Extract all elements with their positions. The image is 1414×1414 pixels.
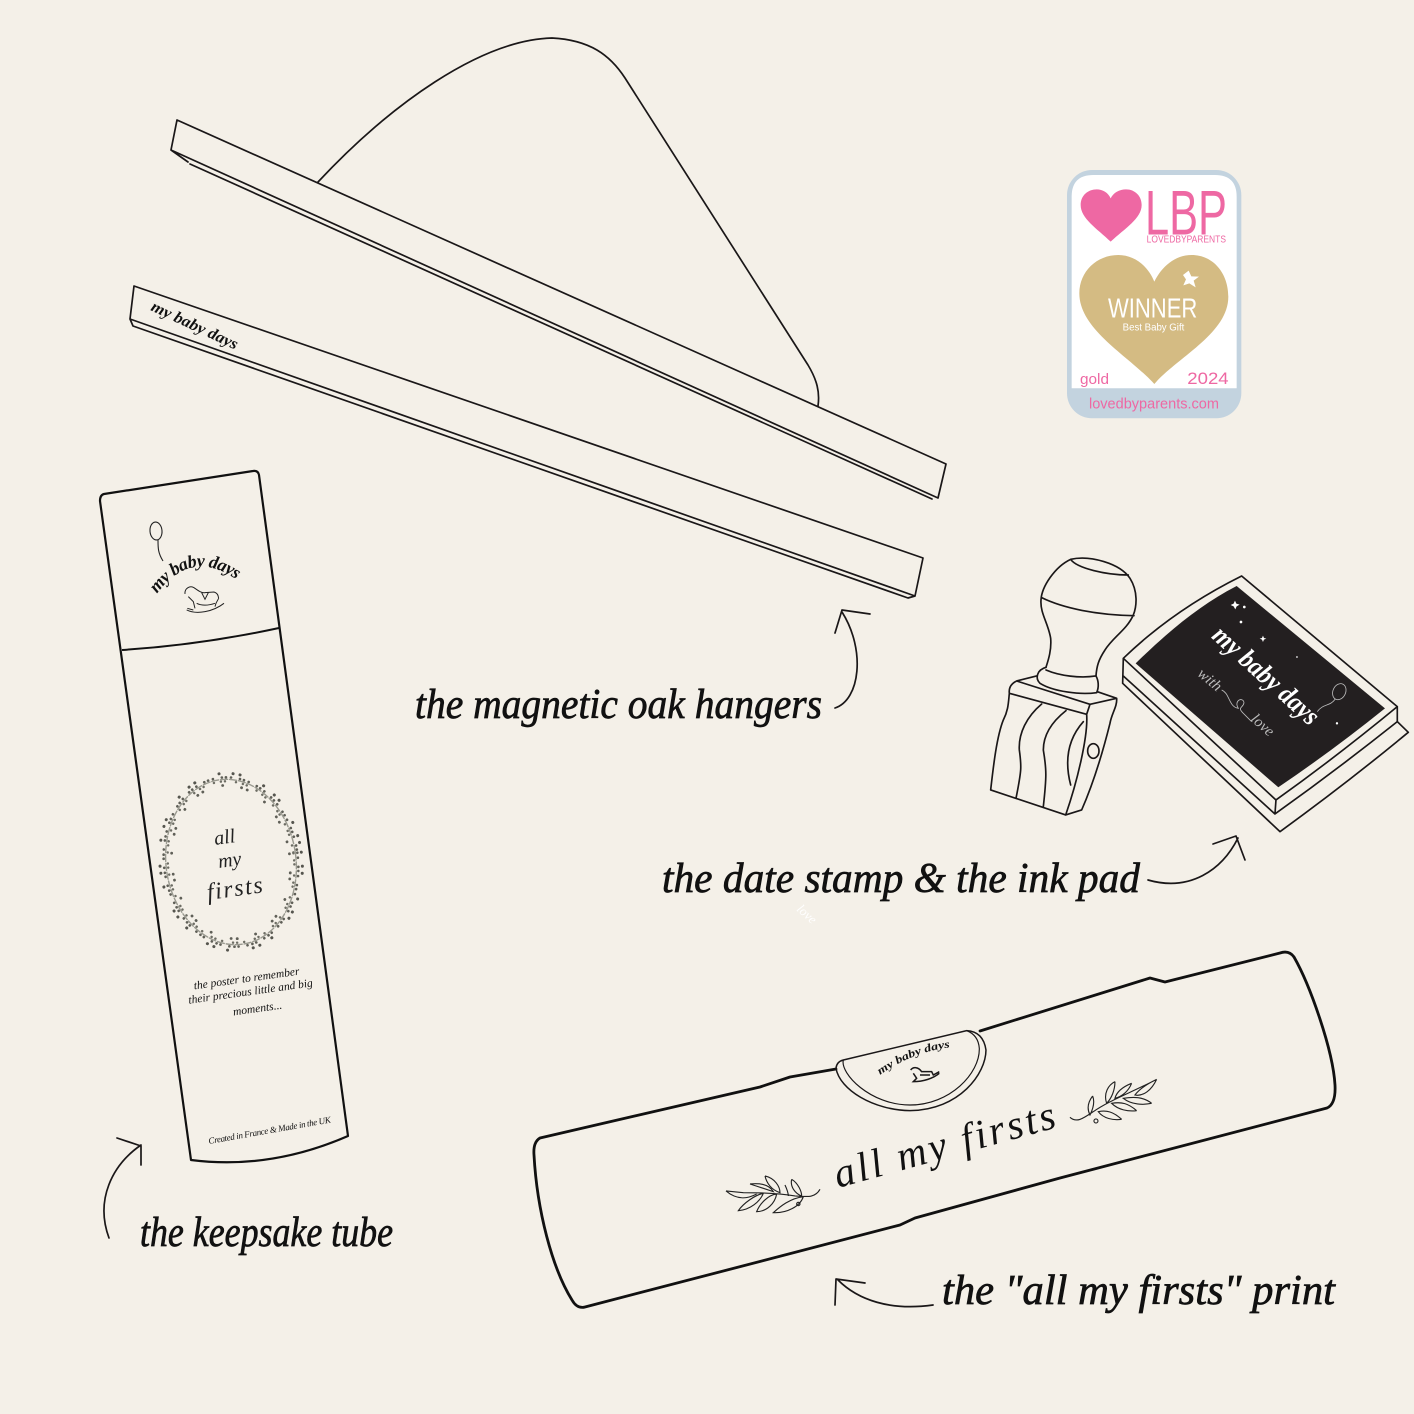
roll outline xyxy=(534,952,1335,1307)
tube footer: Created in France & Made in the UK xyxy=(208,1114,332,1146)
icon: pink heart xyxy=(1081,189,1142,242)
stars xyxy=(1231,601,1338,724)
tube tagline: moments... xyxy=(232,1000,283,1018)
heading: the all my firsts print: the "all my firsts" print xyxy=(942,1268,1336,1314)
tube outline xyxy=(100,471,348,1162)
WINNER: WINNER xyxy=(1108,292,1197,323)
LOVEDBYPARENTS: LOVEDBYPARENTS xyxy=(1147,234,1226,245)
heading: the keepsake tube: the keepsake tube xyxy=(140,1210,393,1256)
pad brand text: my baby days xyxy=(1207,619,1326,731)
icon: rocking horse xyxy=(185,587,224,612)
tube tagline xyxy=(188,966,314,1018)
panel: ink pad xyxy=(1123,576,1408,832)
print title text: all my firsts xyxy=(828,1091,1060,1197)
icon: star xyxy=(1183,271,1199,287)
balloon xyxy=(149,522,163,561)
arrow: to print xyxy=(835,1279,933,1307)
icon: right branch xyxy=(1070,1079,1157,1123)
gold: gold xyxy=(1080,371,1109,388)
poster corner held by the hanger xyxy=(318,38,819,406)
tube tagline: their precious little and big xyxy=(188,977,314,1007)
icon: gold heart xyxy=(1079,255,1228,384)
with love text xyxy=(1194,665,1278,740)
panel: all my firsts rolled print xyxy=(532,950,1336,1309)
wreath text xyxy=(205,825,264,906)
with love text: love xyxy=(1247,710,1278,740)
badge frame xyxy=(1067,170,1241,418)
2024: 2024 xyxy=(1187,369,1229,388)
panel: magnetic oak hangers illustration xyxy=(130,38,946,598)
Best Baby Gift: Best Baby Gift xyxy=(1123,323,1184,334)
icon: seal rocking horse xyxy=(911,1068,939,1082)
arrow: to tube xyxy=(104,1138,141,1238)
lower hanger xyxy=(130,286,923,598)
panel: date stamp xyxy=(991,558,1136,815)
with love text: with xyxy=(1194,665,1225,695)
panel: keepsake tube xyxy=(98,470,350,1164)
tube brand text: my baby days xyxy=(151,555,240,594)
wreath text: firsts xyxy=(205,872,264,906)
pad casing xyxy=(1123,576,1408,832)
wreath text: all xyxy=(213,825,237,850)
heading: the magnetic oak hangers: the magnetic oak hangers xyxy=(415,682,822,728)
seal brand text: my baby days xyxy=(878,1042,950,1075)
paper seal xyxy=(836,1031,986,1111)
LBP logo text: LBP xyxy=(1145,178,1227,248)
wreath text: my xyxy=(217,848,243,873)
stamp handle xyxy=(1041,558,1136,676)
wreath xyxy=(148,764,314,960)
upper hanger xyxy=(171,120,946,499)
lid divider xyxy=(122,628,279,650)
panel: LBP award badge xyxy=(1067,170,1241,418)
icon: left branch xyxy=(726,1176,820,1213)
arrow: to hangers xyxy=(835,610,870,708)
faint love mark: love xyxy=(794,901,820,927)
thread and heart xyxy=(1222,690,1252,722)
black ink surface xyxy=(1136,586,1385,787)
website: lovedbyparents.com xyxy=(1089,395,1219,412)
stamp body xyxy=(991,676,1117,815)
balloon xyxy=(1317,681,1349,712)
stamp collar xyxy=(1037,667,1098,693)
stamp screw xyxy=(1088,744,1099,758)
arrow: to stamp xyxy=(1148,836,1245,883)
lower hanger brand text: my baby days xyxy=(148,298,241,353)
tube tagline: the poster to remember xyxy=(193,966,301,992)
heading: the date stamp and the ink pad: the date stamp & the ink pad xyxy=(662,856,1141,902)
